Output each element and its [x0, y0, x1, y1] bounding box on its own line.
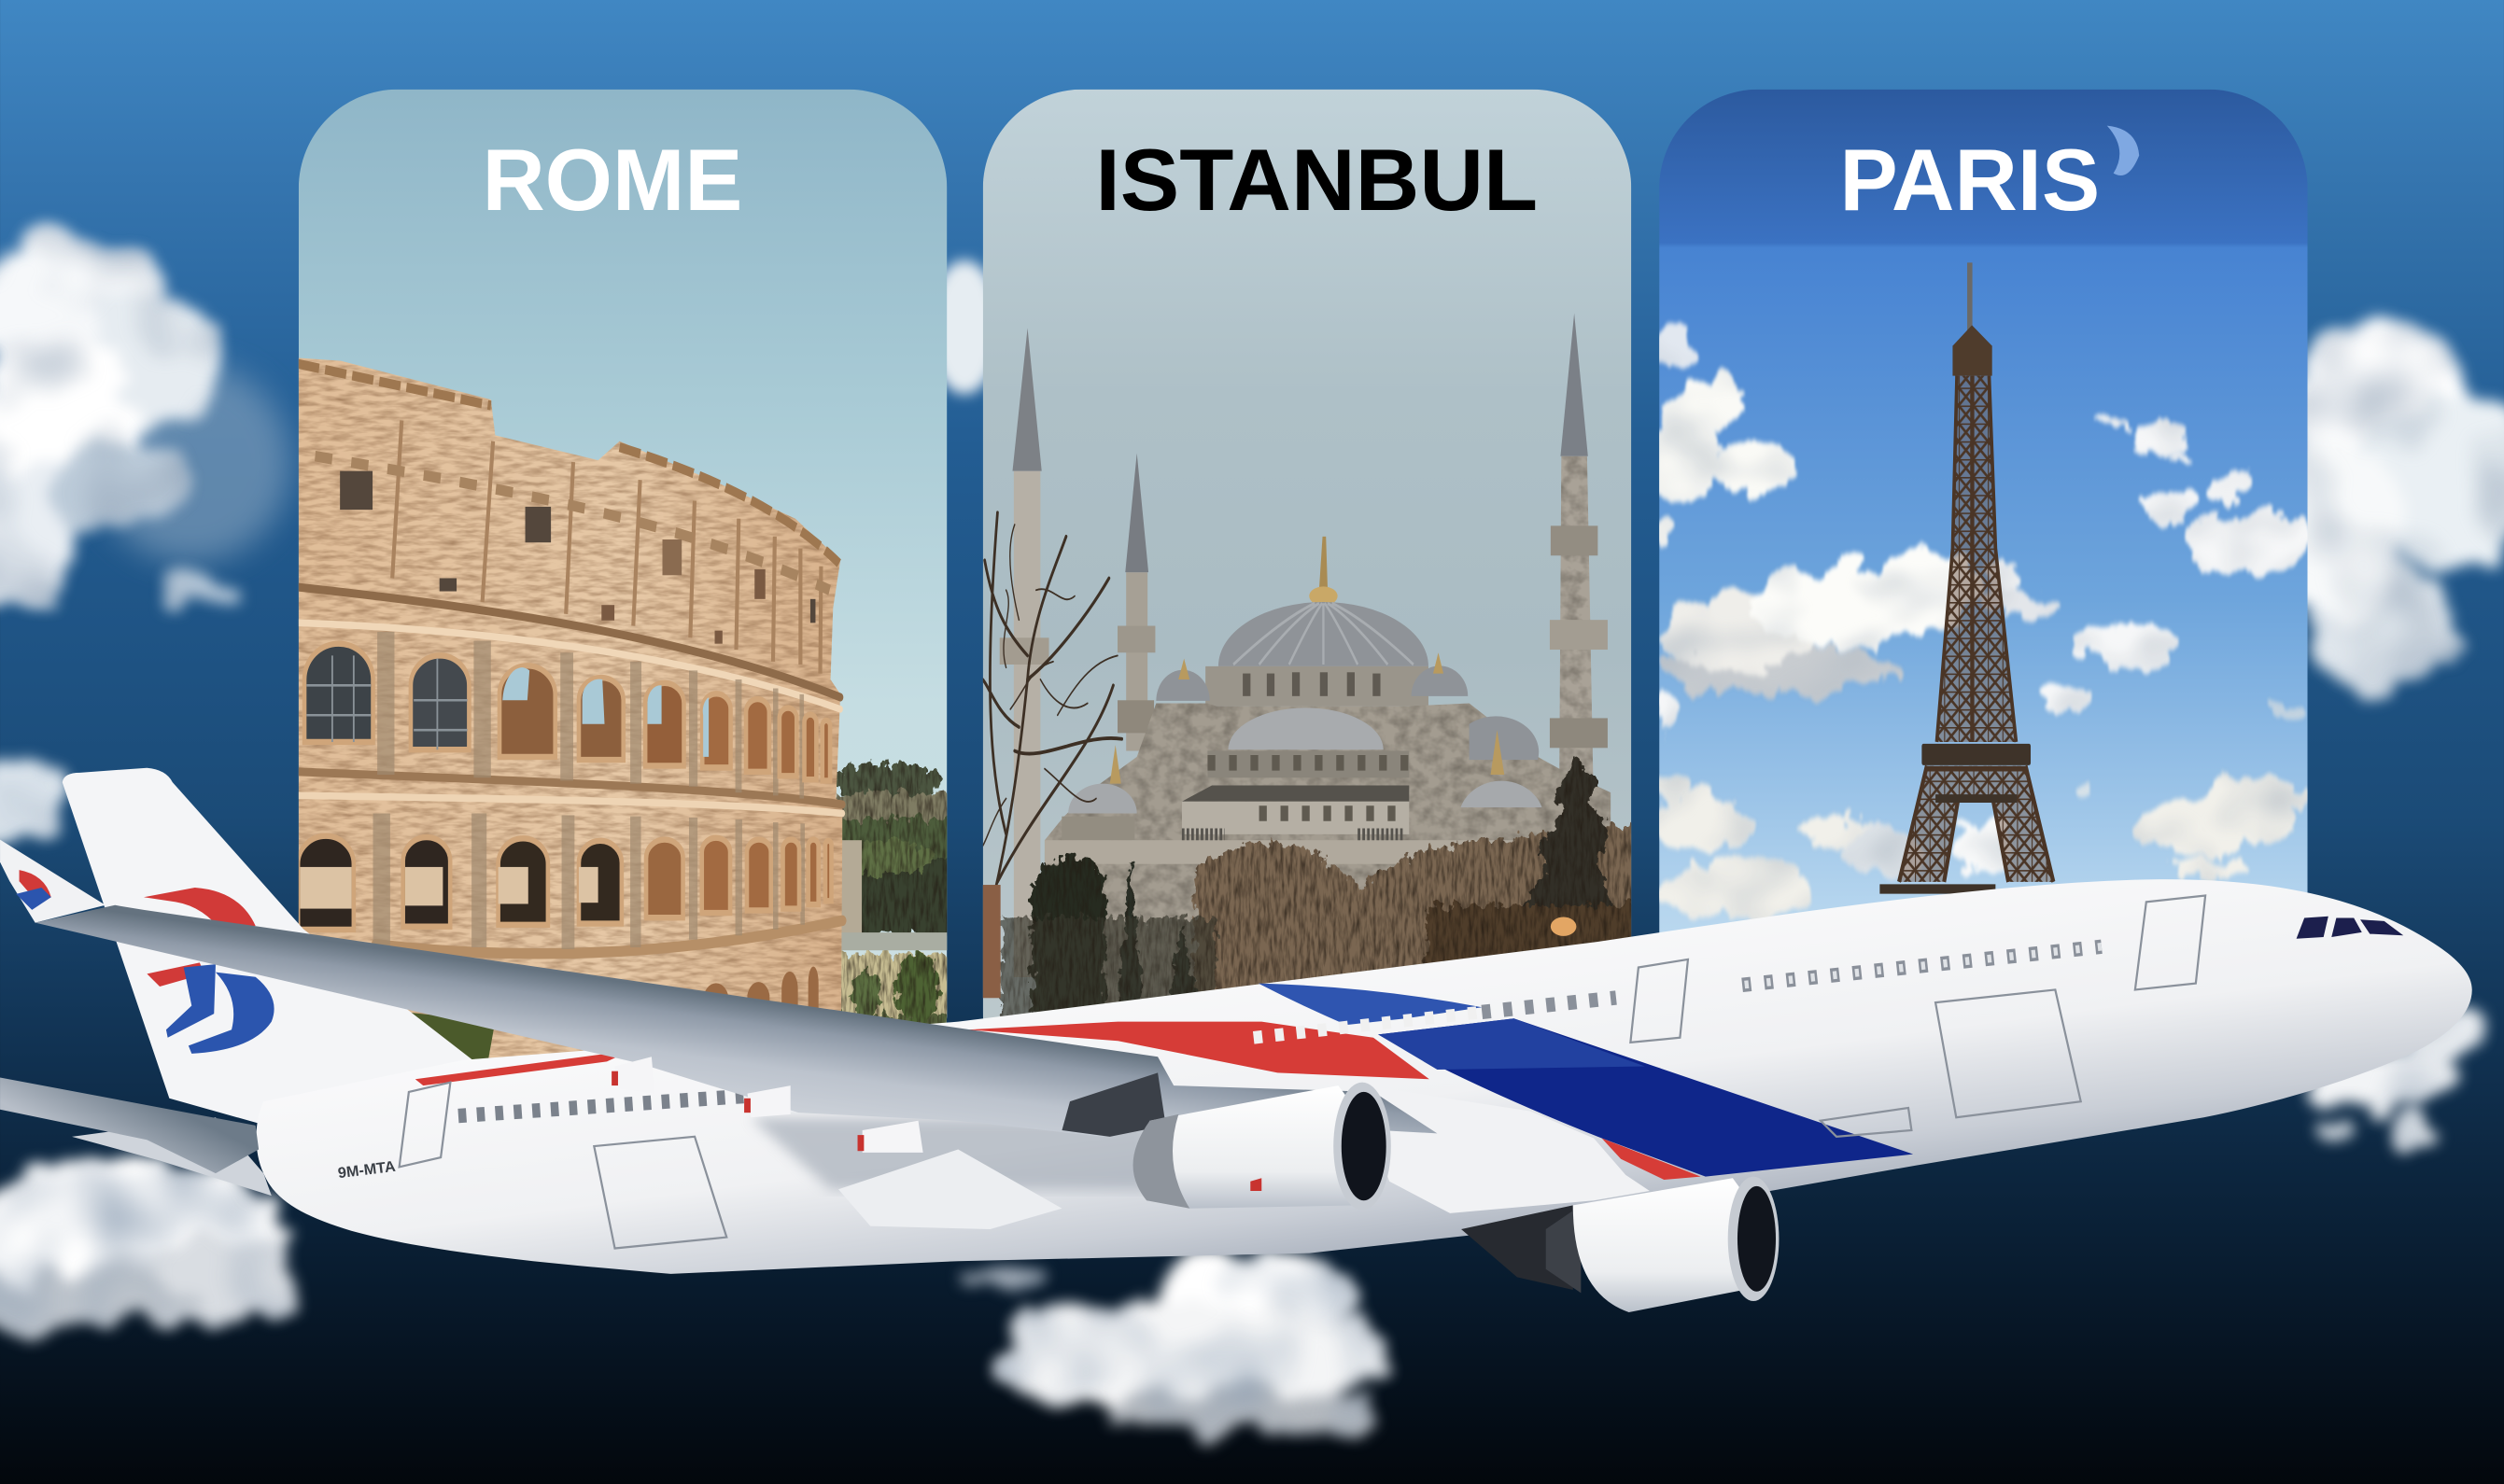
- heading: ROME: ROME: [483, 131, 742, 229]
- right minaret: [1550, 314, 1608, 799]
- registration mark: 9M-MTA: [337, 1158, 397, 1182]
- trees beyond the Colosseum: [837, 759, 947, 1024]
- pale screens inside lower arches: [300, 867, 598, 909]
- clouds upper right: [1655, 417, 2315, 729]
- tail logo: [144, 888, 274, 1054]
- Colosseum cornices: [298, 587, 842, 954]
- Eiffel Tower: [1879, 262, 2053, 889]
- cockpit windows: [2297, 917, 2403, 939]
- third tier arches: [705, 967, 819, 1008]
- Istanbul sky: [983, 90, 1631, 1111]
- small cloud near heading: [2107, 126, 2139, 175]
- cloud: lower left: [0, 1157, 290, 1330]
- panel: Paris: [1644, 90, 2315, 1111]
- heading: ISTANBUL: ISTANBUL: [1095, 131, 1538, 229]
- far engine: [1461, 1177, 1779, 1312]
- side domes: [1068, 665, 1542, 813]
- upper row arches: [304, 644, 830, 780]
- golden finials: [1110, 652, 1504, 784]
- bush under the wing: [411, 1013, 494, 1059]
- centre-left minaret: [1118, 454, 1155, 751]
- cloud: between Rome and Istanbul: [929, 260, 1000, 394]
- Colosseum piers: [373, 632, 805, 949]
- cloud: behind tail: [0, 753, 63, 843]
- airplane: [0, 768, 2472, 1312]
- wing shadow on fuselage: [751, 1117, 1150, 1189]
- cloud upper left: [1644, 323, 1796, 555]
- main dome and finial: [1205, 537, 1428, 707]
- wing body fairing: [838, 1149, 1062, 1229]
- fuselage: [257, 879, 2472, 1274]
- passenger windows: [458, 946, 2102, 1116]
- attic pilasters and windows: [392, 420, 821, 674]
- arcade bands: [1045, 751, 1559, 864]
- near engine: [1133, 1083, 1391, 1210]
- Rome photo scene: Colosseum: [298, 357, 958, 1135]
- Paris photo scene: Eiffel Tower: [1644, 126, 2315, 917]
- mosque body: [1045, 703, 1611, 1097]
- sky clouds: [1644, 323, 2315, 917]
- panel: Rome: [298, 90, 958, 1135]
- cloud: lower centre: [964, 1243, 1389, 1435]
- cloud: under nose: [2306, 1012, 2480, 1149]
- Istanbul photo scene: Blue Mosque: [982, 314, 1632, 1016]
- blue livery stripe: [1259, 984, 1913, 1180]
- flap fairings with red tips: [612, 1057, 923, 1153]
- Rome sky: [299, 90, 947, 1111]
- sky and scaffolding seen through arches: [306, 655, 709, 757]
- bare tree: [982, 512, 1122, 917]
- arch of Constantine and road: [840, 840, 948, 950]
- under tail section: [72, 1117, 272, 1196]
- heading: PARIS: PARIS: [1839, 131, 2100, 229]
- panel: Istanbul: [982, 90, 1632, 1019]
- wing: [35, 905, 1437, 1153]
- far winglet with logo: [0, 840, 106, 923]
- cloud: upper right: [2275, 319, 2504, 690]
- vertical tail: [63, 768, 472, 1149]
- Paris sky: [1659, 90, 2308, 1111]
- cloud: upper left: [0, 234, 290, 607]
- dome drum windows: [1243, 672, 1381, 696]
- red livery stripe: [968, 1022, 1429, 1079]
- small lamp: [1551, 917, 1576, 936]
- lower row arches: [298, 836, 831, 930]
- pylon: [1062, 1072, 1166, 1137]
- brick post: [982, 885, 1001, 998]
- Colosseum wall: [298, 357, 842, 1132]
- door and panel outlines: [400, 896, 2205, 1249]
- horizontal stabilizer: [0, 1078, 259, 1173]
- large central cloud: [1661, 546, 2062, 694]
- clouds lower left and right: [1646, 707, 2303, 917]
- left minaret: [1000, 329, 1049, 977]
- foreground brown trees: [1002, 754, 1640, 1114]
